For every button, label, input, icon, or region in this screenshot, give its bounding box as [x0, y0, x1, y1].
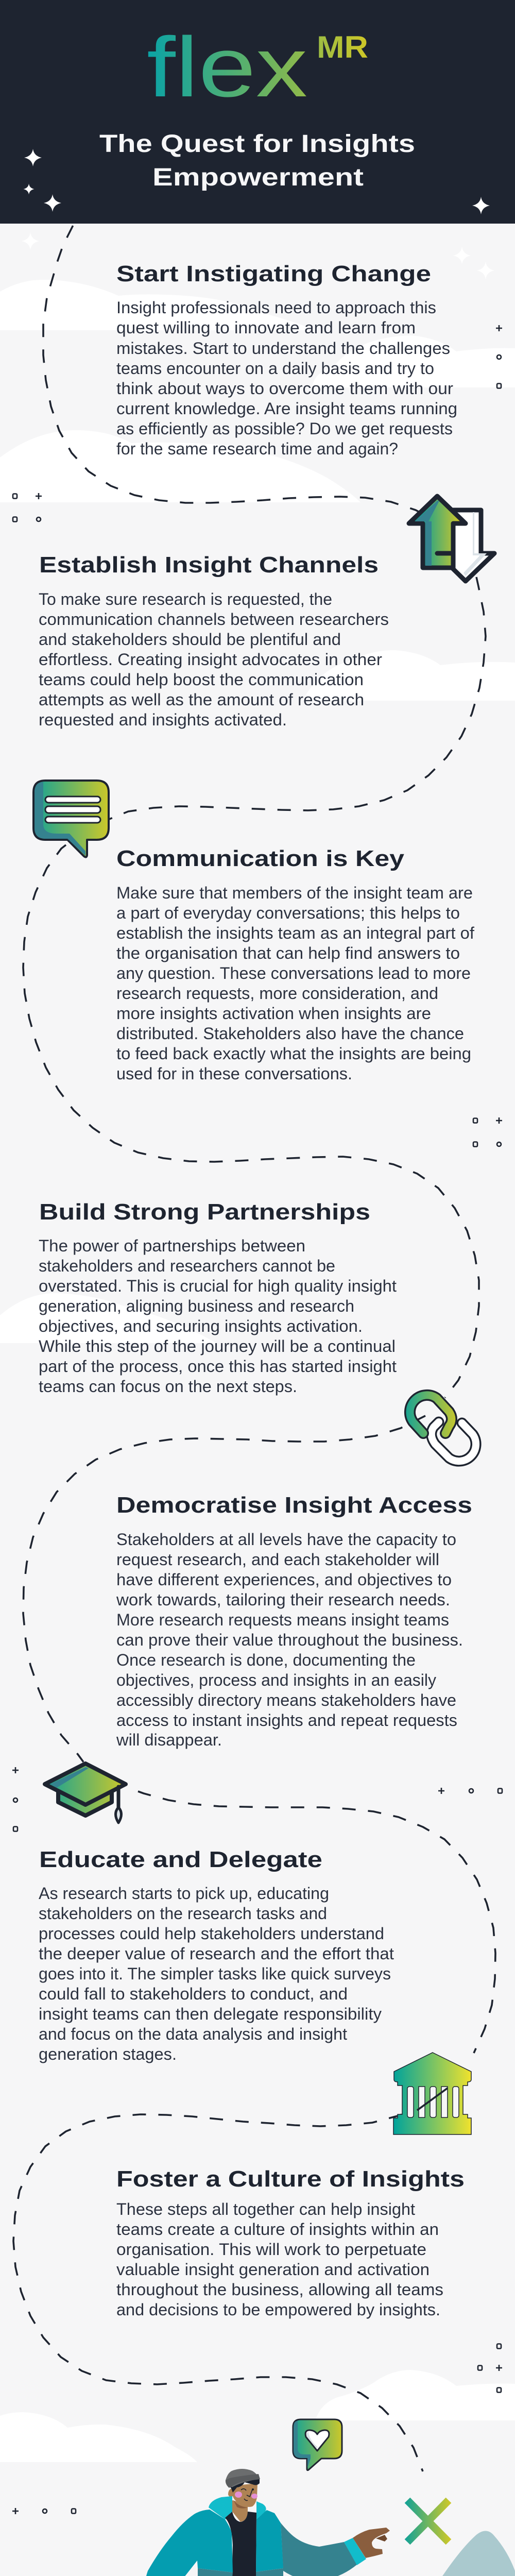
section 6 text: could fall to stakeholders to conduct, and [39, 1985, 348, 2003]
section 1 text: Insight professionals need to approach this [116, 298, 436, 317]
icon: graduation cap [45, 1764, 126, 1823]
section 3 text: establish the insights team as an integral part of [116, 924, 474, 942]
section 6 text: and focus on the data analysis and insight [39, 2025, 347, 2043]
section 4 text: part of the process, once this has started insight [39, 1357, 397, 1376]
section 3 text [116, 884, 474, 1083]
section 5 text: request research, and each stakeholder will [116, 1550, 439, 1569]
icon: speech bubble with heart [293, 2419, 342, 2470]
landscape: mountains [0, 2531, 515, 2576]
icon: up and down arrows [409, 496, 494, 581]
section 4 text: teams can focus on the next steps. [39, 1377, 297, 1396]
far arm [281, 2523, 390, 2576]
section 2 text: effortless. Creating insight advocates in other [39, 650, 382, 669]
logo: flexMR: MR [317, 30, 368, 64]
section 3 text: distributed. Stakeholders also have the chance [116, 1024, 464, 1043]
section 7 text [116, 2200, 443, 2319]
section 2 text: teams could help boost the communication [39, 670, 364, 689]
section 1 text: quest willing to innovate and learn from [116, 318, 416, 337]
section 5 text: Stakeholders at all levels have the capacity to [116, 1530, 456, 1549]
title [99, 130, 415, 191]
section 7 text: teams create a culture of insights within an [116, 2220, 439, 2239]
section 5 text: More research requests means insight teams [116, 1611, 449, 1629]
section 5 text [116, 1530, 463, 1749]
section 3 text: more insights activation when insights are [116, 1004, 431, 1023]
header band [0, 0, 515, 224]
section 2 text: communication channels between researchers [39, 610, 389, 629]
section 2 text: To make sure research is requested, the [39, 590, 332, 608]
section 5 text: accessibly directory means stakeholders have [116, 1691, 456, 1709]
section 2 text: requested and insights activated. [39, 710, 287, 729]
section 1 heading: Start Instigating Change [116, 261, 431, 286]
section 7 text: throughout the business, allowing all teams [116, 2280, 443, 2299]
title: The Quest for Insights [99, 130, 415, 158]
title: Empowerment [152, 164, 364, 191]
section 6 heading: Educate and Delegate [39, 1847, 322, 1872]
section 1 text: current knowledge. Are insight teams running [116, 399, 457, 418]
section 1 text: as efficiently as possible? Do we get requests [116, 419, 453, 438]
person walking [138, 2469, 390, 2576]
section 6 text [39, 1884, 394, 2063]
section 4 text: The power of partnerships between [39, 1236, 305, 1255]
logo: flexMR [147, 20, 368, 114]
section 1 text [116, 298, 457, 458]
t-shirt [225, 2512, 256, 2576]
section 7 text: valuable insight generation and activation [116, 2260, 430, 2279]
section 1 text: mistakes. Start to understand the challenges [116, 339, 450, 358]
section 6 text: goes into it. The simpler tasks like quick surveys [39, 1964, 391, 1983]
section 3 text: to feed back exactly what the insights are being [116, 1044, 471, 1063]
section 5 heading: Democratise Insight Access [116, 1493, 472, 1518]
section 5 text: access to instant insights and repeat requests [116, 1711, 457, 1730]
section 3 text: any question. These conversations lead to more [116, 964, 471, 982]
section 6 text: generation stages. [39, 2045, 177, 2063]
section 4 text [39, 1236, 397, 1396]
section 6 text: the deeper value of research and the effort that [39, 1944, 394, 1963]
section 5 text: can prove their value throughout the business. [116, 1631, 463, 1649]
section 6 text: stakeholders on the research tasks and [39, 1904, 327, 1923]
section 2 text: and stakeholders should be plentiful and [39, 630, 341, 649]
section 1 text: teams encounter on a daily basis and try to [116, 359, 434, 378]
section 2 text: attempts as well as the amount of research [39, 690, 364, 709]
section 5 text: work towards, tailoring their research needs. [116, 1590, 450, 1609]
section 3 text: research requests, more consideration, and [116, 984, 438, 1003]
section 3 heading: Communication is Key [116, 846, 405, 871]
section 4 text: generation, aligning business and research [39, 1297, 354, 1315]
head [226, 2469, 260, 2522]
section 3 text: used for in these conversations. [116, 1064, 352, 1083]
section 2 heading: Establish Insight Channels [39, 552, 379, 578]
ghost stars [22, 232, 494, 279]
section 2 text [39, 590, 389, 729]
hood [209, 2496, 266, 2519]
section 4 text: While this step of the journey will be a continual [39, 1337, 396, 1355]
section 6 text: insight teams can then delegate responsibility [39, 2005, 382, 2023]
section 5 text: will disappear. [116, 1731, 222, 1749]
section 7 text: These steps all together can help insight [116, 2200, 415, 2218]
icon: temple [393, 2053, 471, 2134]
section 3 text: a part of everyday conversations; this helps to [116, 904, 460, 922]
section 1 text: think about ways to overcome them with our [116, 379, 453, 398]
section 7 text: organisation. This will work to perpetuate [116, 2240, 426, 2259]
section 4 heading: Build Strong Partnerships [39, 1199, 370, 1225]
section 5 text: objectives, process and insights in an easily [116, 1671, 436, 1689]
section 3 text: Make sure that members of the insight team are [116, 884, 473, 902]
section 6 text: processes could help stakeholders understand [39, 1924, 384, 1943]
x marker [407, 2500, 449, 2542]
icon: chain link [410, 1395, 476, 1461]
section 7 heading: Foster a Culture of Insights [116, 2166, 465, 2192]
section 3 text: the organisation that can help find answers to [116, 944, 460, 962]
section 5 text: Once research is done, documenting the [116, 1651, 416, 1669]
section 5 text: have different experiences, and objectives to [116, 1570, 452, 1589]
section 7 text: and decisions to be empowered by insights. [116, 2300, 440, 2319]
icon: speech bubble with lines [33, 781, 109, 857]
header stars [23, 149, 490, 214]
section 4 text: stakeholders and researchers cannot be [39, 1257, 335, 1275]
section 1 text: for the same research time and again? [116, 439, 398, 458]
logo: flexMR: flex [147, 20, 307, 114]
section 4 text: objectives, and securing insights activation. [39, 1317, 363, 1335]
section 4 text: overstated. This is crucial for high quality insight [39, 1277, 397, 1295]
section 6 text: As research starts to pick up, educating [39, 1884, 329, 1903]
jacket [145, 2510, 283, 2576]
